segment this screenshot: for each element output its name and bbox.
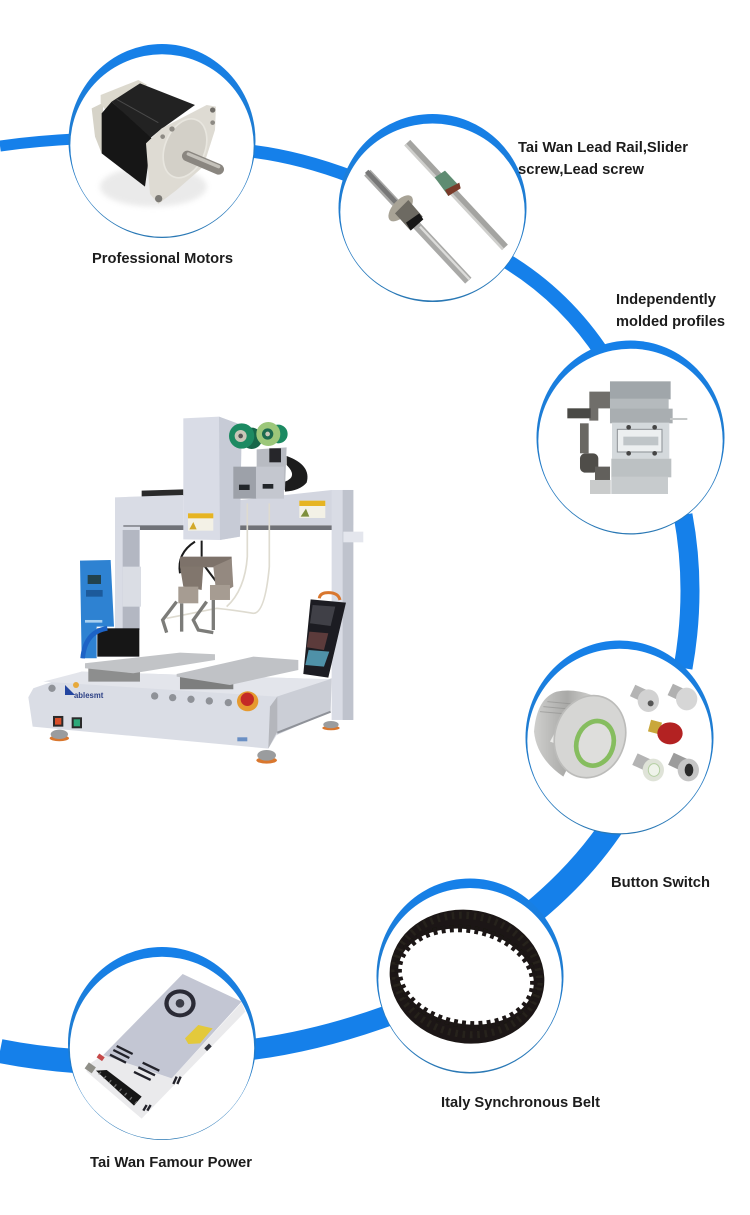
label: professional motors: Professional Motors — [92, 250, 233, 267]
icon: metal push buttons — [534, 684, 699, 787]
circle frame: profiles — [536, 340, 724, 534]
panel: molded profiles — [536, 291, 725, 534]
circle frame: lead rail — [338, 114, 526, 302]
circle frame: power supply — [68, 947, 256, 1140]
illustration: soldering robot machine — [28, 417, 363, 764]
wire feeder units — [233, 447, 287, 499]
icon: stepper motor — [92, 80, 219, 207]
circle frame: motors — [68, 44, 256, 238]
machine base table — [28, 672, 332, 749]
icon: power supply unit — [85, 974, 245, 1119]
blue temperature controller — [80, 560, 114, 658]
solder wires — [167, 503, 269, 618]
label: button switch: Button Switch — [611, 874, 710, 891]
work plates — [85, 653, 298, 689]
front panel logo and controls: ablesmt — [74, 690, 103, 700]
blue connecting ribbon — [0, 139, 690, 1061]
label: power supply: Tai Wan Famour Power — [90, 1154, 252, 1171]
label: molded profiles line one: Independently — [616, 291, 717, 308]
label: lead rail line two: screw,Lead screw — [518, 161, 644, 178]
icon: timing belt — [379, 898, 555, 1056]
teach pendant — [303, 593, 346, 678]
green solder spools — [229, 422, 288, 449]
soldering irons — [163, 541, 233, 633]
machine gantry frame — [115, 489, 363, 720]
icon: molded profile fixture — [567, 381, 687, 494]
panel: professional motors — [68, 44, 256, 267]
circle frame: button switch — [526, 640, 714, 834]
label: synchronous belt: Italy Synchronous Belt — [441, 1094, 600, 1111]
panel: lead rail and screw — [338, 114, 688, 302]
circle frame: synchronous belt — [376, 878, 564, 1074]
small switches — [630, 684, 699, 781]
black cable carrier — [285, 456, 307, 492]
label: molded profiles line two: molded profiles — [616, 313, 725, 330]
front panel logo and controls — [48, 682, 258, 741]
panel: button switch — [526, 640, 714, 891]
machine feet — [50, 721, 340, 764]
machine warning label right — [299, 501, 325, 518]
icon: lead rail and ball screw — [367, 143, 505, 281]
panel: synchronous belt — [376, 878, 600, 1111]
solder head column — [183, 417, 242, 540]
panel: famous power supply — [68, 947, 256, 1171]
black fume box and hose — [83, 628, 139, 658]
label: lead rail line one: Tai Wan Lead Rail,Slider — [518, 139, 688, 156]
